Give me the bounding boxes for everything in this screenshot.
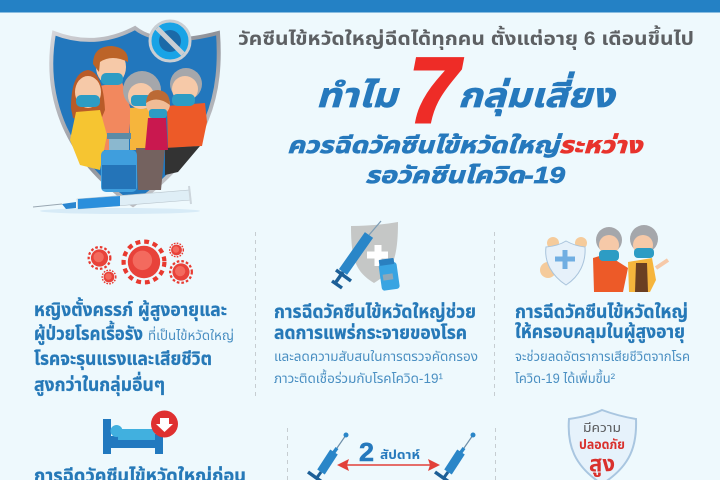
subtitle: ระหว่าง — [559, 132, 644, 158]
text block: reduce spread: การฉีดวัคซีนไข้หวัดใหญ่ช่วย — [274, 301, 476, 322]
text block: coverage for the elderly: จะช่วยลดอัตราการเสียชีวิตจากโรค — [515, 348, 690, 364]
grandmother — [123, 71, 165, 190]
icon: safety shield — [569, 410, 636, 480]
shield — [51, 28, 219, 205]
mother — [70, 70, 107, 170]
text block: coverage for the elderly — [515, 301, 690, 386]
title: why 7 risk groups: ทำไม — [316, 77, 400, 115]
subtitle — [287, 132, 644, 188]
text block: high risk groups: ที่เป็นไข้หวัดใหญ่ — [148, 326, 234, 343]
icon: safety shield: สูง — [589, 451, 615, 477]
text block: high risk groups: สูงกว่าในกลุ่มอื่นๆ — [34, 371, 165, 396]
text block: reduce spread — [274, 301, 478, 386]
title: why 7 risk groups: 7 — [409, 40, 463, 142]
icon: two syringes, two weeks — [308, 432, 476, 480]
title: why 7 risk groups: กลุ่มเสี่ยง — [458, 71, 617, 116]
icon: bed with down arrow — [103, 410, 178, 454]
illustration: family in shield — [33, 21, 219, 214]
icon: red viruses — [89, 242, 192, 284]
icon: elderly couple with shield — [540, 225, 668, 292]
text block: coverage for the elderly: ให้ครอบคลุมในผู้สูงอายุ — [515, 321, 685, 343]
text block: reduce spread: ลดการแพร่กระจายของโรค — [274, 322, 467, 343]
icon: two syringes, two weeks: 2 — [359, 437, 374, 467]
top bar — [0, 0, 720, 12]
child — [145, 90, 170, 150]
text block: high risk groups — [34, 297, 234, 396]
heading: intro line: วัคซีนไข้หวัดใหญ่ฉีดได้ทุกคน ตั้งแต่อายุ 6 เดือนขึ้นไป — [238, 25, 694, 50]
text block: high risk groups: ผู้ป่วยโรคเรื้อรัง — [34, 320, 143, 345]
grandfather — [165, 68, 207, 175]
text block: reduce spread: ภาวะติดเชื้อร่วมกับโรคโควิด-19¹ — [274, 369, 443, 386]
icon: blocked virus badge — [150, 21, 190, 61]
vaccine vial — [101, 133, 137, 192]
title: why 7 risk groups — [316, 40, 617, 142]
text block: high risk groups: หญิงตั้งครรภ์ ผู้สูงอายุและ — [34, 297, 227, 321]
icon: syringe, shield and vial — [332, 221, 400, 291]
text block: coverage for the elderly: การฉีดวัคซีนไข้หวัดใหญ่ — [515, 301, 688, 322]
text block: reduce spread: และลดความสับสนในการตรวจคัดกรอง — [274, 349, 478, 364]
text block: coverage for the elderly: โควิด-19 ได้เพิ่มขึ้น² — [515, 369, 615, 386]
subtitle: ควรฉีดวัคซีนไข้หวัดใหญ่ — [287, 132, 563, 158]
icon: two syringes, two weeks: สัปดาห์ — [380, 448, 420, 462]
father — [93, 46, 131, 150]
syringe — [33, 186, 200, 214]
subtitle: รอวัคซีนโควิด-19 — [365, 162, 565, 188]
text block: high risk groups: โรคจะรุนแรงและเสียชีวิต — [34, 348, 212, 370]
icon: safety shield: มีความ — [583, 421, 621, 435]
icon: safety shield: ปลอดภัย — [579, 437, 625, 452]
